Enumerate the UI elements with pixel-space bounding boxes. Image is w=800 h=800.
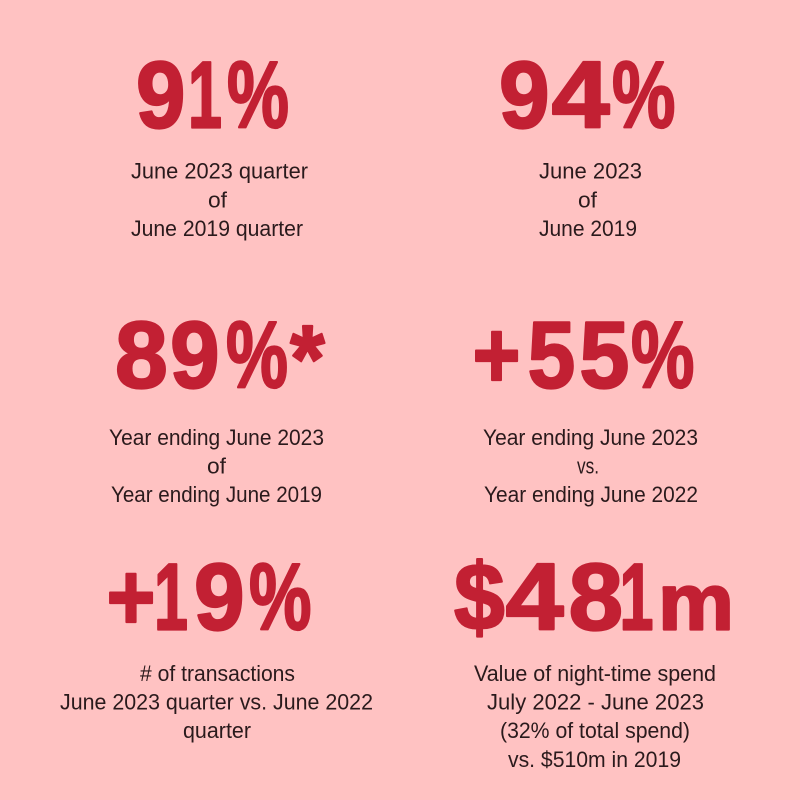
description: +19%: # of transactions <box>140 661 295 686</box>
number: +55%: % <box>631 302 694 408</box>
description: +19%: quarter <box>183 718 251 743</box>
description: +55%: Year ending June 2023 <box>483 425 698 450</box>
description: 89%*: Year ending June 2019 <box>111 482 322 507</box>
description: $481m: July 2022 - June 2023 <box>487 690 704 714</box>
number: 91%: 1 <box>188 42 222 148</box>
number: 94%: 4 <box>552 42 610 148</box>
description: 91%: of <box>208 188 228 212</box>
number: +55%: 5 <box>528 302 575 408</box>
description: $481m: (32% of total spend) <box>500 718 690 743</box>
number: $481m: 4 <box>506 544 564 650</box>
number: +19%: 1 <box>154 544 188 650</box>
description: 91% <box>131 158 308 241</box>
stat: +55% year ending <box>472 302 698 507</box>
number: 94%: % <box>612 42 675 148</box>
number: +19%: 9 <box>194 544 245 650</box>
stat: +19% transactions <box>60 544 373 743</box>
description: 89%* <box>109 425 324 507</box>
description: 89%*: Year ending June 2023 <box>109 425 324 450</box>
number: 94%: 9 <box>499 42 550 148</box>
number: +55%: 5 <box>579 302 629 408</box>
number: 89%*: * <box>290 306 325 412</box>
description: 94%: June 2023 <box>539 158 642 184</box>
description: 94% <box>539 158 642 241</box>
description: 91%: June 2023 quarter <box>131 158 308 184</box>
description: 94%: June 2019 <box>539 216 637 241</box>
number: 89%*: 9 <box>170 302 220 408</box>
description: $481m: Value of night-time spend <box>474 661 716 686</box>
number: +55%: + <box>472 302 520 408</box>
number: $481m: m <box>658 558 734 646</box>
description: 91%: June 2019 quarter <box>131 216 303 241</box>
stat: 94% June 2023 <box>499 42 675 241</box>
description: +55%: Year ending June 2022 <box>484 482 698 507</box>
stat: 91% June 2023 quarter <box>131 42 308 241</box>
description: +19%: June 2023 quarter vs. June 2022 <box>60 690 373 714</box>
description: $481m <box>474 661 716 772</box>
number: $481m: $ <box>454 544 505 650</box>
number: $481m: 1 <box>620 544 654 650</box>
description: 89%*: of <box>207 454 227 478</box>
description: $481m: vs. $510m in 2019 <box>508 747 681 772</box>
number: 91%: 9 <box>136 42 185 148</box>
number: $481m: 8 <box>569 544 623 650</box>
description: +19% <box>60 661 373 743</box>
number: +19%: % <box>249 544 312 650</box>
number: +19%: + <box>106 544 156 650</box>
description: +55%: vs. <box>577 454 599 478</box>
description: 94%: of <box>578 188 598 212</box>
number: 91%: % <box>227 42 289 148</box>
number: 89%*: 8 <box>115 302 168 408</box>
description: +55% <box>483 425 698 507</box>
stat: 89%* year ending <box>109 302 325 507</box>
number: 89%*: % <box>226 302 288 408</box>
stat: $481m night-time spend <box>454 544 734 772</box>
